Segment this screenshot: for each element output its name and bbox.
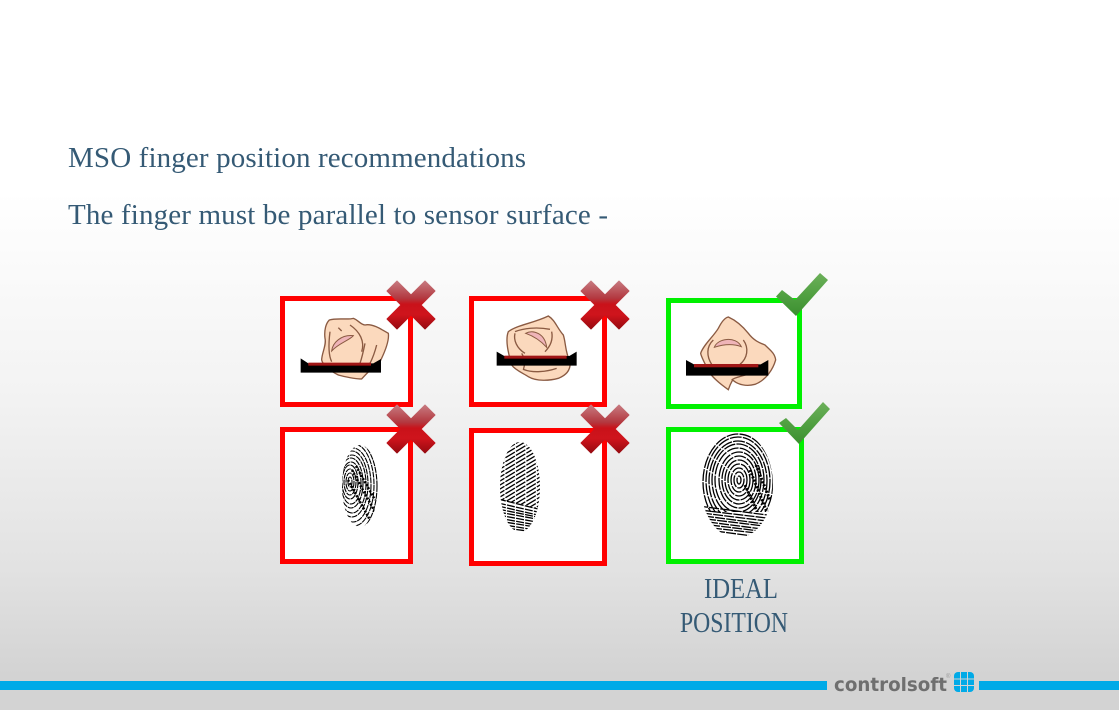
icon: red cross 2 <box>581 281 629 329</box>
icon: hand on sensor <box>301 318 388 379</box>
icon: hand on sensor <box>497 316 577 380</box>
caption: IDEAL <box>704 574 778 605</box>
caption: POSITION <box>680 608 788 639</box>
logo registered mark: ® <box>946 673 951 680</box>
icon: red cross 1 <box>387 281 435 329</box>
panel: correct finger side view <box>668 300 800 406</box>
logo wordmark: controlsoft <box>834 674 947 696</box>
icon: full fingerprint <box>702 433 773 536</box>
panel: incorrect finger side view, tilted right <box>282 298 410 404</box>
icon: narrow fingerprint <box>342 445 378 526</box>
subheading: The finger must be parallel to sensor surface - <box>68 199 608 231</box>
panel: incorrect finger side view, tilted left <box>472 298 604 404</box>
panel: correct fingerprint <box>668 428 802 562</box>
caption <box>680 574 788 639</box>
panel: incorrect fingerprint, offset right <box>282 429 410 562</box>
heading: MSO finger position recommendations <box>68 142 526 174</box>
footer bar left <box>0 681 827 690</box>
icon: logo grid <box>954 672 974 692</box>
footer bar right <box>979 681 1119 690</box>
icon: green check 1 <box>776 273 828 316</box>
icon: narrow fingerprint <box>500 442 540 532</box>
icon: green check 2 <box>779 402 830 444</box>
icon: hand on sensor <box>686 317 776 390</box>
icon: red cross 4 <box>581 405 629 453</box>
panel: incorrect fingerprint, offset left <box>472 422 604 564</box>
icon: red cross 3 <box>387 405 435 453</box>
